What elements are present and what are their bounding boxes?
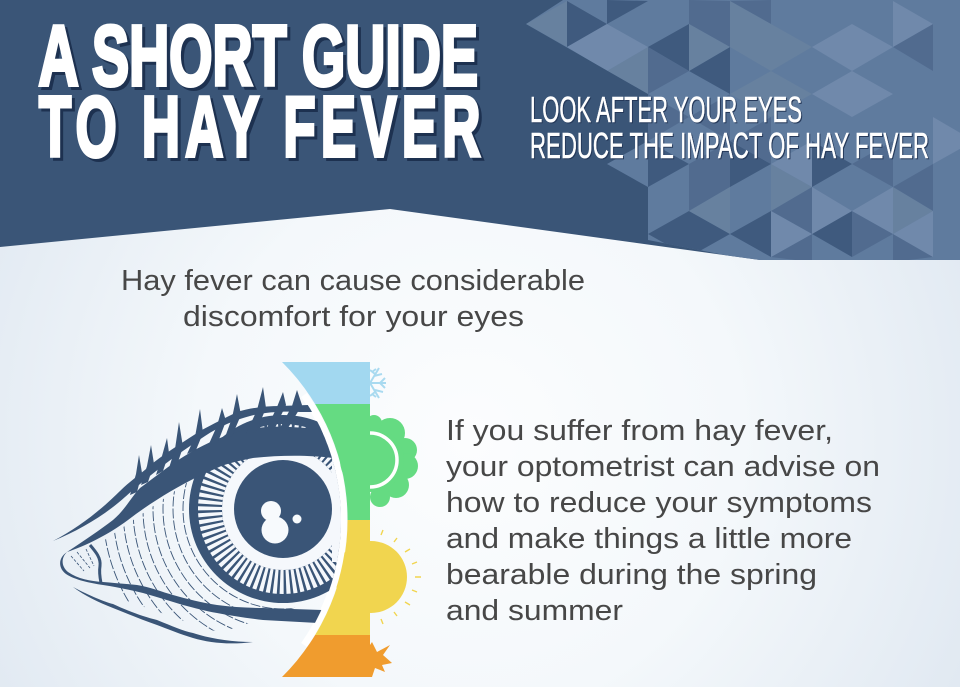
white arc on cloud <box>370 433 397 487</box>
advice paragraph: and make things a little more <box>446 523 852 555</box>
eye illustration <box>53 387 344 647</box>
intro text: Hay fever can cause considerable <box>121 265 585 297</box>
advice paragraph: and summer <box>446 595 624 627</box>
title: A SHORT GUIDE <box>38 9 478 104</box>
white sweep beside the bands <box>304 395 343 645</box>
intro text <box>121 265 585 333</box>
advice paragraph <box>446 415 880 627</box>
advice paragraph: If you suffer from hay fever, <box>446 415 833 447</box>
advice paragraph: how to reduce your symptoms <box>446 487 872 519</box>
pupil highlights <box>261 501 302 544</box>
lower eyelid <box>60 552 322 623</box>
subtitle <box>530 89 929 166</box>
advice paragraph: your optometrist can advise on <box>446 451 880 483</box>
upper eyelid <box>67 421 345 552</box>
eyelashes <box>130 387 302 495</box>
iris <box>189 415 341 603</box>
lash line <box>53 405 313 541</box>
advice paragraph: bearable during the spring <box>446 559 817 591</box>
title <box>38 9 480 174</box>
lower lash curve <box>73 587 253 643</box>
icon: cloud <box>340 415 418 507</box>
inner corner fold <box>90 545 101 583</box>
sclera hatching <box>105 482 296 631</box>
icon: snowflake <box>370 368 386 398</box>
title: TO HAY FEVER <box>39 79 480 174</box>
intro text: discomfort for your eyes <box>183 301 524 333</box>
header banner <box>0 0 960 262</box>
icon: maple leaf <box>370 642 392 677</box>
seasonal colour bands <box>282 362 370 677</box>
icon: sun <box>335 530 421 624</box>
triangle pattern <box>520 0 960 262</box>
pupil <box>234 460 332 558</box>
